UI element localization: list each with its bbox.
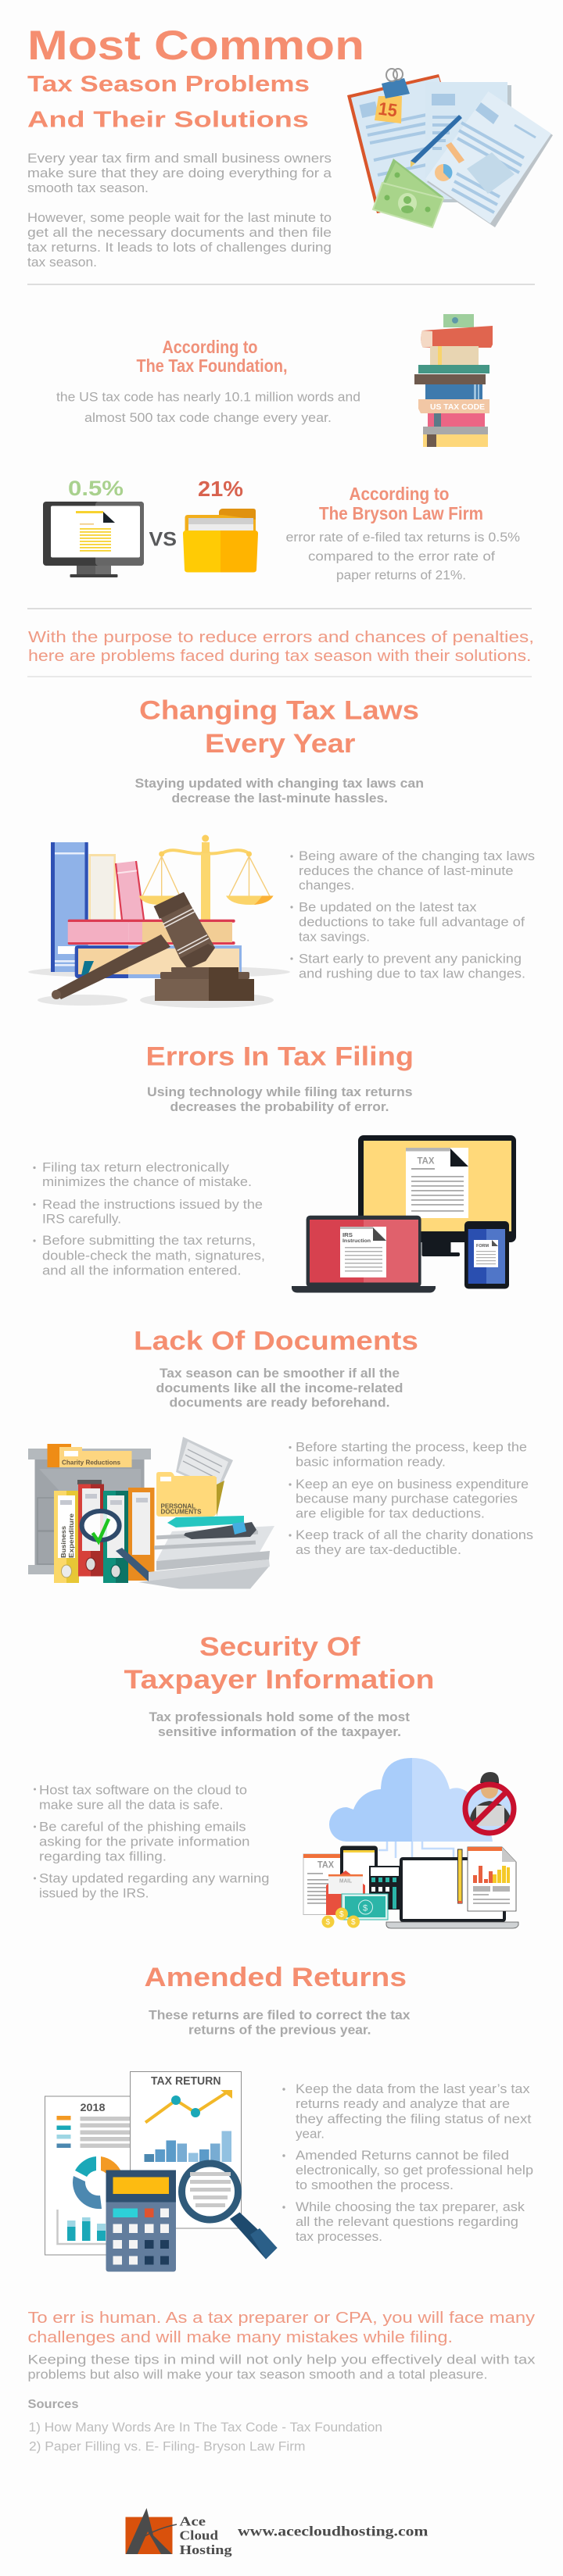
heading: Security Of [199,1632,360,1662]
icon: cloud with devices and hacker: $ [339,1910,344,1919]
tips list: Filing tax return electronically [42,1161,230,1175]
tips list: because many purchase categories [296,1492,518,1506]
tips list: Keep track of all the charity donations [296,1528,533,1542]
comparison: e-file vs paper [43,477,258,577]
subheading: returns of the previous year. [188,2024,371,2038]
icon: tax return reports, calculator and magnifier: TAX RETURN [151,2074,221,2088]
tips list: Keep an eye on business expenditure [296,1477,529,1492]
label: vs: VS [149,528,177,550]
website url: www.acecloudhosting.com [238,2524,429,2539]
stat: bryson law firm: compared to the error rate of [308,550,495,564]
conclusion: To err is human. As a tax preparer or CPA, you will face many [28,2309,536,2327]
tips list: returns ready and analyze that are [296,2097,510,2111]
stat: bryson law firm: error rate of e-filed tax returns is 0.5% [286,531,520,545]
icon: cloud with devices and hacker [303,1758,518,1928]
stat: tax foundation: The Tax Foundation, [136,355,288,376]
tips list [33,1161,265,1278]
heading: Lack Of Documents [134,1327,418,1356]
stat: tax foundation: almost 500 tax code change every year. [84,411,332,425]
heading: Every Year [205,729,355,759]
icon: tax return reports, calculator and magnifier [45,2072,277,2272]
icon: cloud with devices and hacker: $ [351,1918,356,1927]
title [27,23,364,133]
tips list: changes. [299,878,355,892]
subheading: Staying updated with changing tax laws can [134,777,424,791]
purpose statement [28,628,534,665]
tips list: and rushing due to tax law changes. [299,967,525,981]
icon: tax documents, clipboard, pen and money [347,69,553,227]
tips list: regarding tax filling. [39,1850,167,1864]
subheading: documents like all the income-related [156,1381,403,1395]
heading [139,695,419,759]
label: 0.5%: 0.5% [68,477,124,500]
icon: cloud with devices and hacker: $ [325,1918,330,1927]
icon: desktop, laptop and phone: TAX [418,1155,435,1166]
intro text: get all the necessary documents and then file [27,226,332,240]
tips list: IRS carefully. [42,1213,121,1227]
tips list: and all the information entered. [42,1264,241,1278]
tips list: tax savings. [299,930,370,944]
tips list: Host tax software on the cloud to [39,1783,247,1797]
tips list: Read the instructions issued by the [42,1198,263,1212]
divider [27,608,532,609]
tips list: asking for the private information [39,1835,250,1849]
conclusion [28,2309,536,2381]
tips list: deductions to take full advantage of [299,916,525,930]
tips list: Start early to prevent any panicking [299,952,522,966]
title: Tax Season Problems [27,72,310,97]
label: 21%: 21% [198,477,243,501]
icon: cloud with devices and hacker: $ [363,1903,368,1913]
heading [124,1632,435,1695]
purpose statement: With the purpose to reduce errors and chances of penalties, [28,628,534,646]
tips list: Be careful of the phishing emails [39,1820,246,1835]
tips list: are eligible for tax deductions. [296,1506,485,1520]
sources: 1) How Many Words Are In The Tax Code - Tax Foundation [28,2421,382,2435]
logo: ace cloud hosting: Cloud [180,2528,219,2542]
heading: Changing Tax Laws [139,695,419,725]
tips list: reduces the chance of last-minute [299,864,513,878]
section: security of taxpayer information [34,1632,518,1928]
icon: cabinet, binders and folders: PERSONAL [161,1503,195,1510]
stat: bryson law firm: The Bryson Law Firm [319,503,483,523]
icon: stack of books: US TAX CODE [430,403,485,412]
icon: desktop, laptop and phone: Instruction [342,1238,371,1244]
title: Most Common [27,23,364,69]
icon: gavel, books and scales [28,834,290,1008]
tips list: electronically, so get professional help [296,2163,533,2178]
subheading: sensitive information of the taxpayer. [158,1725,401,1739]
tips list: year. [296,2127,325,2141]
tips list [289,1441,533,1557]
logo: ace cloud hosting: Ace [180,2514,206,2528]
intro text: tax season. [27,255,97,270]
tips list [290,849,535,981]
subheading [147,1085,413,1114]
tips list: Before submitting the tax returns, [42,1234,256,1248]
heading: Taxpayer Information [124,1665,435,1695]
icon: tax documents, clipboard, pen and money: 15 [377,98,399,121]
tips list: issued by the IRS. [39,1886,149,1900]
subheading [156,1367,403,1409]
intro text: make sure that they are doing everything for a [27,166,332,180]
icon: cabinet, binders and folders: Charity Reductions [62,1458,120,1466]
stat: bryson law firm: According to [349,484,449,504]
intro text [27,152,332,270]
sources [28,2398,382,2453]
icon: stack of books [414,314,493,447]
logo: ace cloud hosting [125,2508,232,2557]
subheading [149,1710,411,1739]
tips list: Be updated on the latest tax [299,900,477,914]
tips list: as they are tax-deductible. [296,1543,461,1557]
icon: monitor [43,502,144,577]
section: changing tax laws [28,695,535,1008]
stat: tax foundation: the US tax code has nearly 10.1 million words and [56,391,360,405]
stat: bryson law firm [286,484,520,583]
stat: tax foundation: According to [163,337,258,357]
tips list: Stay updated regarding any warning [39,1872,269,1886]
intro text: smooth tax season. [27,181,149,195]
conclusion: challenges and will make many mistakes while filing. [28,2328,453,2346]
subheading: decrease the last-minute hassles. [172,791,388,806]
sources: Sources [28,2398,79,2411]
tips list [34,1783,269,1900]
purpose statement: here are problems faced during tax season with their solutions. [28,647,532,665]
icon: cabinet, binders and folders: Expenditure [67,1513,75,1558]
section: errors in tax filing [33,1042,516,1292]
icon: cloud with devices and hacker: MAIL [339,1878,353,1885]
tips list: minimizes the chance of mistake. [42,1175,252,1189]
tips list: to smoothen the process. [296,2178,454,2192]
tips list: all the relevant questions regarding [296,2215,518,2229]
conclusion: Keeping these tips in mind will not only help you effectively deal with tax [28,2353,536,2367]
tips list: Keep the data from the last year’s tax [296,2082,530,2096]
icon: desktop, laptop and phone: IRS [342,1233,353,1238]
heading: Amended Returns [144,1963,407,1992]
subheading [134,777,424,806]
tips list: Before starting the process, keep the [296,1441,527,1455]
tips list: make sure all the data is safe. [39,1799,224,1813]
subheading: Tax professionals hold some of the most [149,1710,411,1724]
icon: cloud with devices and hacker: TAX [317,1860,334,1870]
heading: Errors In Tax Filing [145,1042,414,1072]
icon: cabinet, binders and folders: DOCUMENTS [161,1508,202,1516]
subheading: These returns are filed to correct the tax [149,2008,411,2022]
tips list: tax processes. [296,2230,382,2244]
intro text: tax returns. It leads to lots of challenges during [27,241,332,255]
title: And Their Solutions [27,108,309,133]
subheading: Tax season can be smoother if all the [160,1367,400,1381]
icon: cabinet, binders and folders: Business [59,1526,67,1558]
icon: cabinet, binders and folders [28,1437,274,1589]
divider [27,284,535,285]
intro text: Every year tax firm and small business owners [27,152,332,166]
icon: folder [183,509,258,572]
stat: tax foundation [56,337,360,425]
icon: desktop, laptop and phone [292,1135,516,1292]
conclusion: problems but also will make your tax season smooth and a total pleasure. [28,2367,488,2381]
icon: desktop, laptop and phone: FORM [476,1244,489,1249]
tips list: basic information ready. [296,1455,446,1469]
sources: 2) Paper Filling vs. E- Filing- Bryson Law Firm [29,2439,305,2453]
section: amended returns [45,1963,533,2272]
stat: bryson law firm: paper returns of 21%. [336,569,466,583]
subheading: decreases the probability of error. [170,1100,389,1114]
tips list: Amended Returns cannot be filed [296,2149,509,2163]
tips list: double-check the math, signatures, [42,1249,265,1263]
tips list: Being aware of the changing tax laws [299,849,535,863]
tips list [282,2082,533,2244]
subheading: documents are ready beforehand. [169,1395,389,1409]
logo: ace cloud hosting: Hosting [180,2542,232,2557]
subheading: Using technology while filing tax returns [147,1085,413,1099]
tips list: While choosing the tax preparer, ask [296,2200,525,2214]
section: lack of documents [28,1327,533,1589]
icon: tax return reports, calculator and magnifier: 2018 [80,2101,106,2113]
subheading [149,2008,411,2038]
intro text: However, some people wait for the last minute to [27,211,332,225]
tips list: they affecting the filing status of next [296,2113,532,2127]
